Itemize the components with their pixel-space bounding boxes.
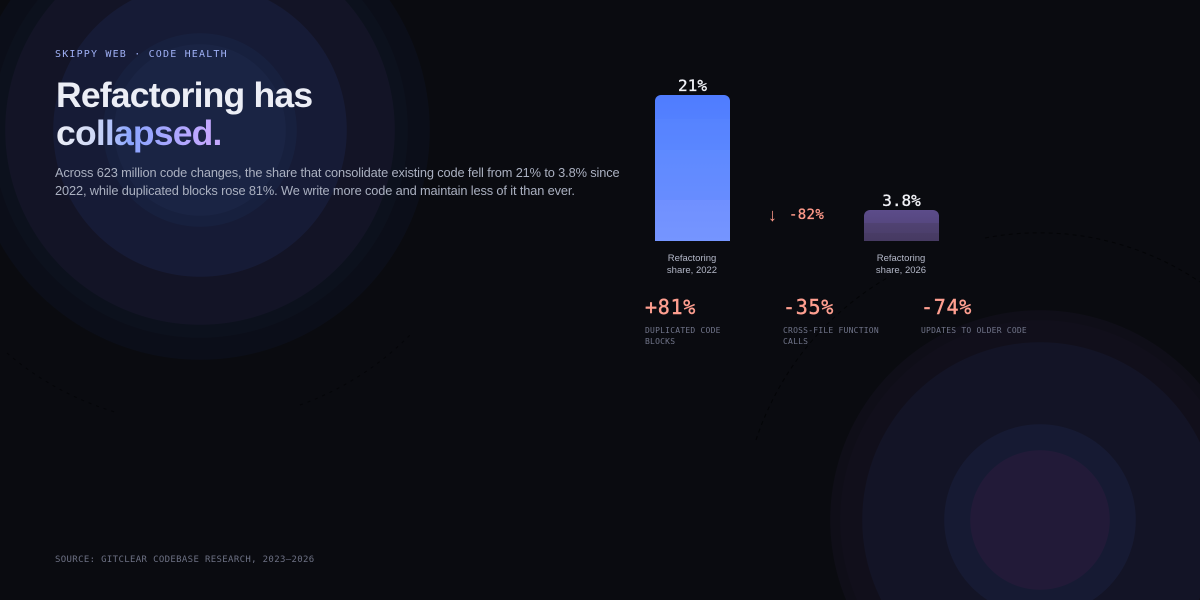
- bar: 2026: [864, 210, 939, 241]
- title: [56, 75, 312, 153]
- background glow: top left: [0, 0, 431, 361]
- bar chart: refactoring share: [655, 76, 939, 276]
- caption: 2026: [876, 252, 926, 276]
- change value: -82%: [789, 207, 824, 223]
- title: Refactoring has: [56, 75, 312, 115]
- background glow: bottom right: [830, 310, 1200, 600]
- caption: 2026: share, 2026: [876, 265, 926, 276]
- bar: 2022: [655, 95, 730, 241]
- eyebrow label: SKIPPY WEB · CODE HEALTH: [55, 49, 228, 60]
- stat label: CALLS: [783, 336, 808, 346]
- stat label: CROSS-FILE FUNCTION: [783, 326, 879, 335]
- caption: 2022: [667, 252, 717, 276]
- intro paragraph: Across 623 million code changes, the share that consolidate existing code fell from 21% to 3.8% since: [55, 165, 619, 180]
- stat label: UPDATES TO OLDER CODE: [921, 326, 1027, 335]
- source note: SOURCE: GITCLEAR CODEBASE RESEARCH, 2023–2026: [55, 555, 315, 565]
- stat label: [645, 326, 721, 346]
- stat value: +81%: [645, 295, 696, 319]
- value: 3.8%: 3.8%: [882, 191, 921, 210]
- title: collapsed.: [56, 113, 222, 153]
- stat: updates to older code: [921, 295, 1027, 335]
- stat label: BLOCKS: [645, 336, 675, 346]
- caption: 2026: Refactoring: [877, 252, 925, 264]
- icon: down arrow: ↓: [768, 205, 777, 225]
- caption: 2022: share, 2022: [667, 265, 717, 276]
- stat label: [783, 326, 879, 346]
- intro paragraph: 2022, while duplicated blocks rose 81%. We write more code and maintain less of it than ever.: [55, 183, 575, 198]
- stat: duplicated code: [645, 295, 721, 346]
- caption: 2022: Refactoring: [668, 252, 716, 264]
- value: 21%: 21%: [678, 76, 707, 95]
- stat: cross-file calls: [783, 295, 879, 346]
- stat value: -74%: [921, 295, 972, 319]
- intro paragraph: [55, 165, 620, 198]
- stat label: DUPLICATED CODE: [645, 326, 721, 335]
- stat value: -35%: [783, 295, 834, 319]
- change callout: [768, 205, 824, 225]
